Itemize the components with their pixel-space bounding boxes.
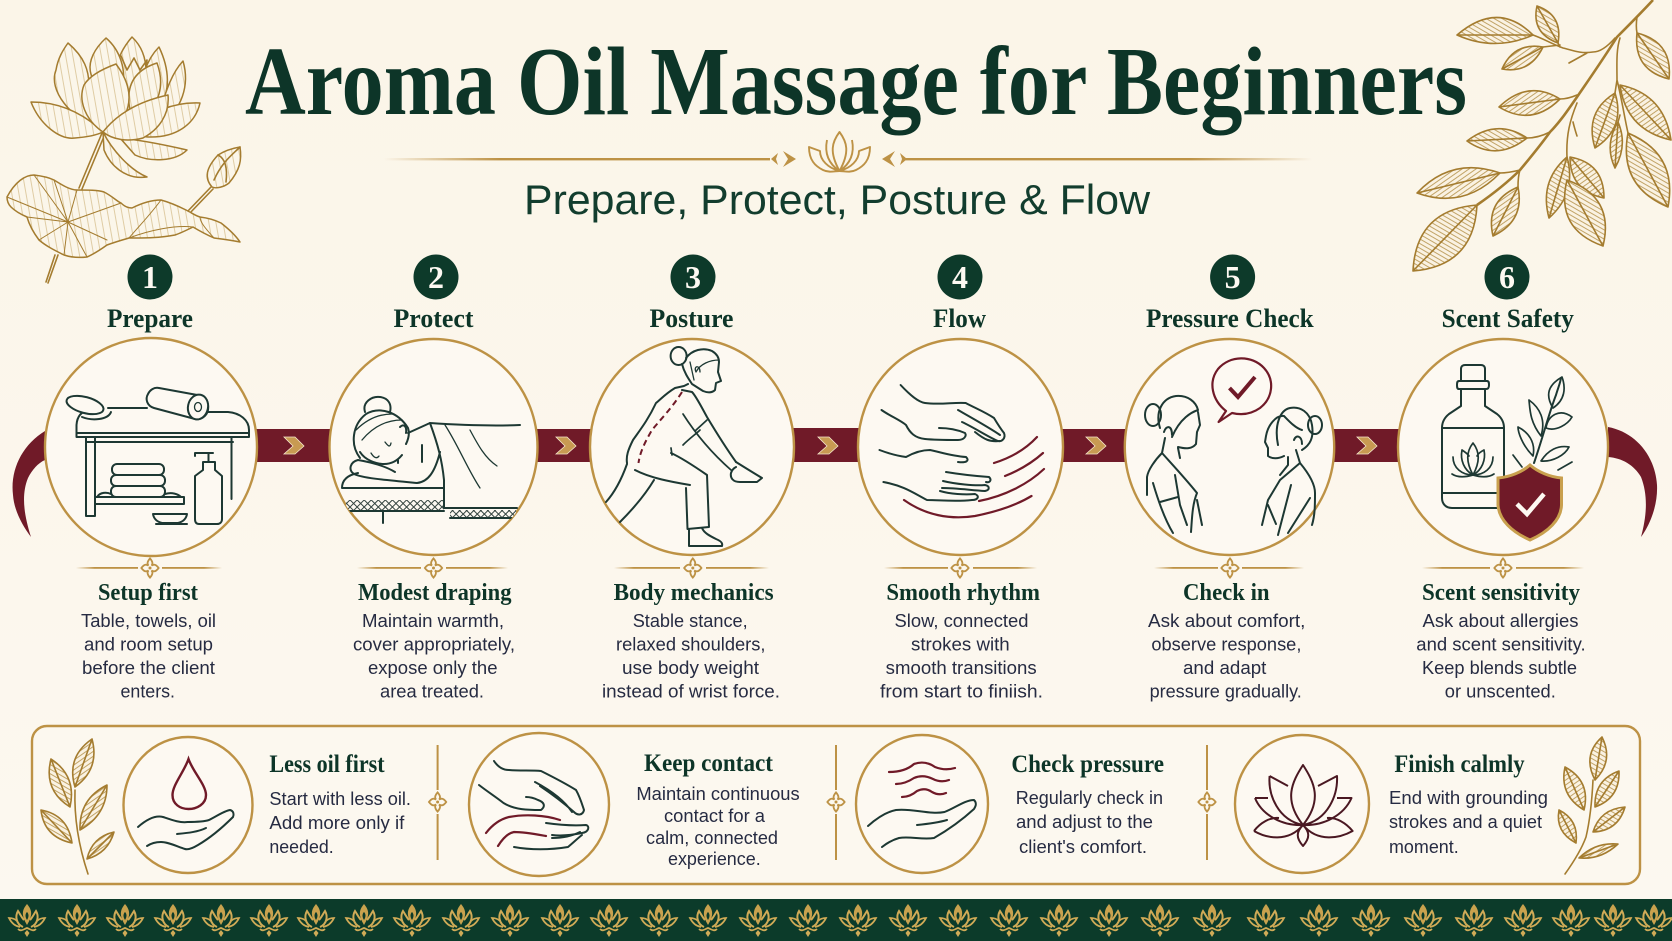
tip text: Start with less oil.: [269, 788, 411, 809]
badge 3: 3: [685, 259, 701, 295]
step text: enters.: [120, 680, 175, 702]
tip 1: less oil first: [124, 737, 411, 873]
step 3: posture: [590, 254, 794, 702]
icon: pressure waves over hand: [856, 735, 988, 873]
separator: [827, 745, 845, 860]
step text: strokes with: [911, 634, 1010, 654]
icon: therapist posture with spine line: [590, 339, 794, 555]
step text: Maintain warmth,: [362, 610, 504, 631]
step text: observe response,: [1151, 634, 1301, 654]
step text: [1416, 580, 1586, 702]
tip text: Add more only if: [269, 812, 405, 833]
step text: [81, 580, 216, 702]
footer ornamental band: [0, 899, 1672, 941]
tip 2: keep contact: [469, 733, 800, 876]
tip text: End with grounding: [1389, 787, 1548, 808]
ornament divider: [1154, 558, 1304, 578]
step text: pressure gradually.: [1150, 680, 1302, 702]
badge 5: [1210, 254, 1255, 300]
step text: and scent sensitivity.: [1416, 634, 1586, 654]
step text: Smooth rhythm: [886, 580, 1040, 606]
icon: oil drop over hand: [124, 737, 252, 873]
tip text: Check pressure: [1011, 751, 1164, 778]
chevron arrows: [284, 437, 1377, 454]
tip text: [1389, 751, 1548, 857]
tip text: contact for a: [664, 805, 766, 826]
lotus bud: [207, 147, 241, 188]
step text: from start to finiish.: [880, 680, 1043, 702]
step text: Slow, connected: [894, 610, 1028, 631]
step text: [602, 580, 780, 702]
ribbon with chevrons: [13, 427, 1657, 537]
step text: before the client: [82, 657, 215, 678]
tip text: and adjust to the: [1016, 811, 1153, 832]
icon: oil bottle, leaves and safety shield: [1398, 339, 1608, 555]
title: Aroma Oil Massage for Beginners: [245, 28, 1467, 135]
badge 4: [938, 254, 982, 300]
step text: cover appropriately,: [353, 634, 515, 654]
tip text: calm, connected: [646, 827, 778, 848]
step heading: Flow: [933, 304, 986, 333]
lotus leaf: [7, 175, 240, 257]
step heading: Pressure Check: [1146, 304, 1314, 333]
badge 3: [670, 254, 716, 300]
right sprig: [1558, 737, 1625, 874]
step text: Modest draping: [358, 580, 512, 606]
step text: and adapt: [1183, 657, 1266, 678]
tip text: Regularly check in: [1016, 787, 1163, 808]
step text: Ask about allergies: [1422, 610, 1578, 631]
step text: Body mechanics: [614, 580, 774, 606]
step text: area treated.: [380, 680, 484, 702]
subtitle: Prepare, Protect, Posture & Flow: [524, 176, 1151, 223]
tip 3: check pressure: [856, 735, 1164, 873]
ornament divider: [614, 558, 769, 578]
tip text: client's comfort.: [1019, 836, 1147, 857]
tip text: Finish calmly: [1394, 751, 1525, 778]
badge 1: 1: [142, 259, 158, 295]
tip text: needed.: [269, 836, 334, 857]
step text: instead of wrist force.: [602, 680, 780, 702]
tip text: [1011, 751, 1164, 857]
badge 4: 4: [952, 259, 968, 295]
step text: Keep blends subtle: [1422, 657, 1577, 678]
icon: massage table with towels and oil: [45, 338, 257, 556]
step text: Stable stance,: [633, 610, 748, 631]
ornament divider: [1422, 558, 1584, 578]
step text: Check in: [1183, 580, 1270, 606]
icon: lotus outline: [1235, 735, 1369, 873]
step text: or unscented.: [1445, 680, 1556, 702]
badge 5: 5: [1225, 259, 1241, 295]
step 2: protect: [330, 254, 538, 702]
badge 6: [1484, 254, 1530, 300]
step 6: scent safety: [1398, 254, 1608, 702]
badge 1: [128, 254, 172, 300]
step text: use body weight: [622, 657, 759, 678]
step text: Ask about comfort,: [1148, 610, 1305, 631]
step text: relaxed shoulders,: [616, 634, 766, 654]
tip text: Maintain continuous: [636, 783, 800, 804]
tip text: [636, 750, 800, 869]
tip text: Keep contact: [644, 750, 774, 777]
icon: therapist and client talking with check bubble: [1125, 339, 1334, 555]
step text: and room setup: [84, 634, 213, 654]
panel: bottom tips: [32, 726, 1640, 884]
step heading: Prepare: [107, 304, 193, 333]
tip text: moment.: [1389, 836, 1459, 857]
step heading: Protect: [394, 304, 474, 333]
step 4: flow: [858, 254, 1063, 702]
tip text: strokes and a quiet: [1389, 811, 1542, 832]
tip text: Less oil first: [269, 751, 385, 778]
step text: expose only the: [368, 657, 498, 678]
tip 4: finish calmly: [1235, 735, 1548, 873]
step text: Scent sensitivity: [1422, 580, 1580, 606]
step text: smooth transitions: [886, 657, 1037, 678]
illustration: golden leafy branch: [1413, 0, 1671, 271]
step heading: Scent Safety: [1442, 304, 1574, 333]
ornament divider: [76, 558, 222, 578]
step 5: pressure check: [1125, 254, 1334, 702]
separator: [1198, 745, 1216, 860]
icon: draped client lying on table: [330, 339, 538, 555]
step text: [880, 580, 1043, 702]
step text: [353, 580, 515, 702]
step text: [1148, 580, 1305, 702]
step heading: Posture: [650, 304, 734, 333]
badge 2: [414, 254, 458, 300]
icon: hands with flowing strokes: [858, 339, 1063, 555]
ornament divider: [884, 558, 1037, 578]
tip text: experience.: [668, 848, 761, 869]
icon: hands keeping contact: [469, 733, 609, 876]
separator: [429, 745, 446, 860]
step 1: prepare: [45, 254, 257, 702]
badge 6: 6: [1499, 259, 1515, 295]
title divider with lotus: [384, 132, 1312, 172]
illustration: lotus flower with leaf and bud: [7, 37, 241, 283]
badge 2: 2: [428, 259, 444, 295]
tip text: [269, 751, 411, 857]
left sprig: [41, 739, 114, 874]
step text: Setup first: [98, 580, 198, 606]
step text: Table, towels, oil: [81, 610, 216, 631]
ornament divider: [357, 558, 508, 578]
